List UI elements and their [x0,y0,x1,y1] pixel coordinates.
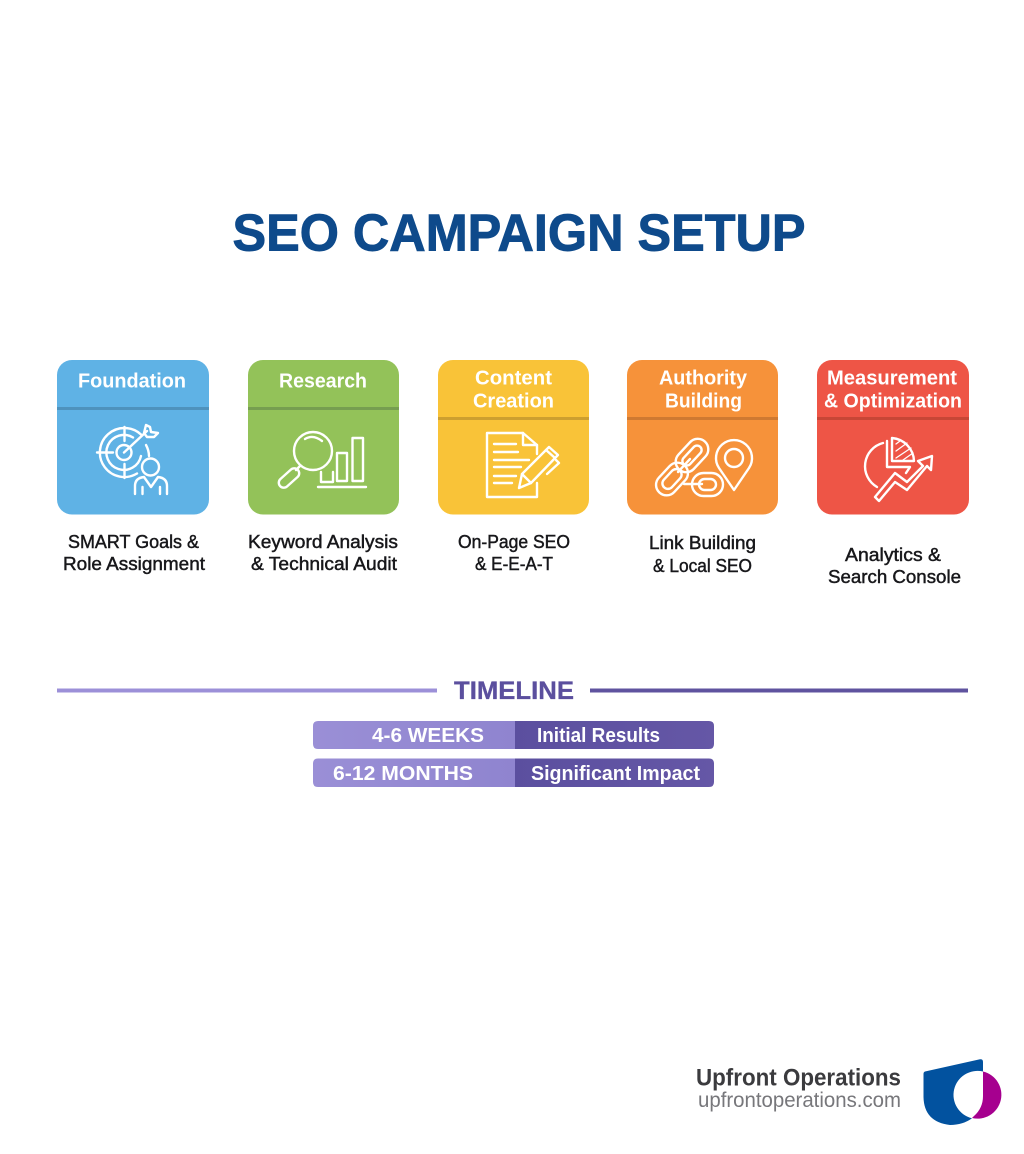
panel: authority building [627,360,778,576]
timeline row: 4-6 weeks [313,721,714,749]
label: research: Keyword Analysis [248,532,398,552]
label: content creation: & E-E-A-T [475,554,553,574]
label: content creation: On-Page SEO [458,532,570,552]
timeline heading: TIMELINE [454,677,574,705]
heading: content creation [473,366,554,412]
footer brand [696,1059,1001,1125]
card background: content creation [438,360,589,514]
title: SEO CAMPAIGN SETUP [232,204,806,262]
timeline row: 6-12 months: Significant Impact [531,763,700,785]
heading: foundation: Foundation [78,370,186,392]
logo [924,1059,1001,1125]
panel: research [248,360,399,574]
timeline section [57,677,968,787]
heading: content creation: Content [475,366,552,390]
label: authority building: Link Building [649,533,756,553]
card background: research [248,360,399,514]
card background: measurement and optimization [817,360,969,514]
heading: measurement and optimization [824,366,962,412]
heading: authority building [659,366,748,412]
brand name: Upfront Operations [696,1064,901,1092]
label: authority building: & Local SEO [653,556,752,576]
timeline row: 4-6 weeks: Initial Results [537,725,660,747]
heading: authority building: Authority [659,366,748,390]
label: authority building [649,533,756,576]
icon: pie chart and trend arrow [865,438,932,501]
icon: chain links and map pin [652,434,752,500]
label: measurement and optimization: Search Console [828,567,961,587]
timeline row: 4-6 weeks: 4-6 WEEKS [372,725,484,747]
label: research [248,532,398,574]
icon: magnifier and bars [277,432,366,490]
heading: authority building: Building [665,390,742,412]
label: foundation: SMART Goals & [68,532,199,552]
icon: target and person [97,425,167,494]
heading: research: Research [279,370,367,392]
card background: authority building [627,360,778,514]
brand url: upfrontoperations.com [698,1089,901,1112]
panel: measurement and optimization [817,360,969,587]
icon: document and pen [487,433,559,497]
timeline row: 6-12 months [313,758,714,787]
label: research: & Technical Audit [251,554,397,574]
timeline row: 6-12 months: 6-12 MONTHS [333,763,473,785]
label: foundation [63,532,205,574]
heading: content creation: Creation [473,390,554,412]
card background: foundation [57,360,209,514]
heading: measurement and optimization: Measurement [827,366,957,390]
label: foundation: Role Assignment [63,554,205,574]
label: content creation [458,532,570,574]
label: measurement and optimization: Analytics & [845,545,941,565]
heading: measurement and optimization: & Optimization [824,390,962,412]
panel: content creation [438,360,589,574]
panel: foundation [57,360,209,574]
label: measurement and optimization [828,545,961,587]
